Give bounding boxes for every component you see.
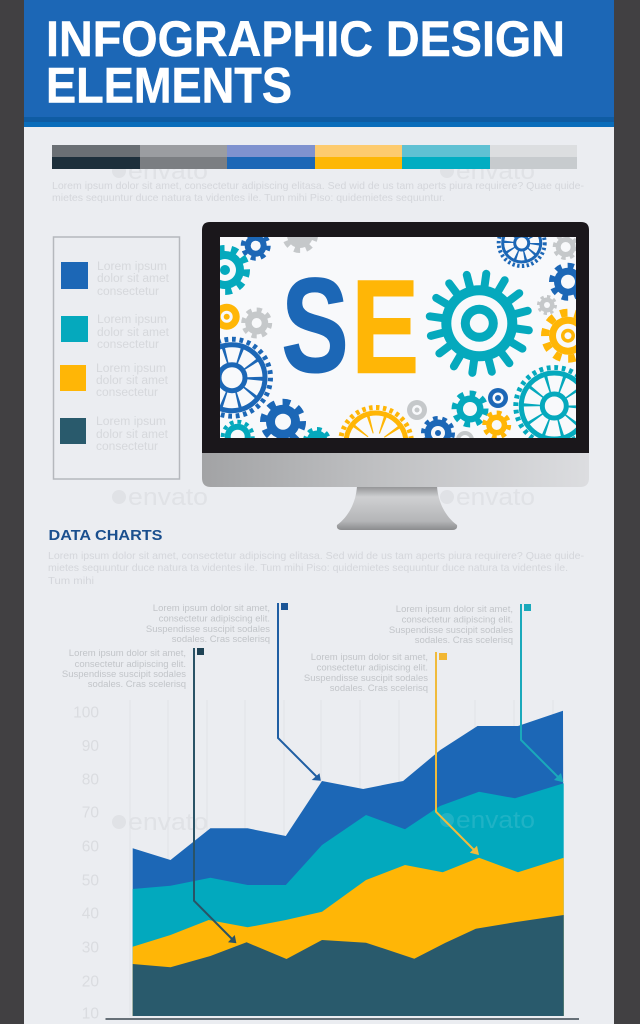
big blue spoked wheel left xyxy=(220,336,273,419)
blue gear right xyxy=(552,266,584,298)
legend item: blue: Lorem ipsum xyxy=(97,261,167,273)
section description: mietes sequuntur duce natura ta videntes ile. Tum mihi Piso: quidemietes sequuntur duce natura ta videntes ile. xyxy=(48,562,568,574)
series: teal area xyxy=(133,783,564,1016)
y-axis labels: 20 xyxy=(82,974,99,990)
series: yellow area xyxy=(133,858,564,1016)
series: dark teal area xyxy=(133,915,564,1016)
leader arrow: teal xyxy=(521,604,563,782)
grey disc xyxy=(407,400,427,420)
callout text: yellow: sodales. Cras scelerisq xyxy=(330,683,428,694)
y-axis labels: 40 xyxy=(82,906,99,922)
callout text: teal xyxy=(389,604,513,646)
callout text: dark teal: Suspendisse suscipit sodales xyxy=(62,669,186,680)
monitor chin xyxy=(202,453,589,487)
yellow gear right xyxy=(545,313,591,359)
legend item: yellow: Lorem ipsum xyxy=(96,363,166,375)
callout text: dark blue xyxy=(146,603,270,645)
legend item: teal: dolor sit amet xyxy=(97,327,170,339)
legend panel xyxy=(54,237,180,479)
teal gear bottom xyxy=(303,427,330,438)
section description: Lorem ipsum dolor sit amet, consectetur adipiscing elitasa. Sed wid de us tam aperts piura requirere? Quae quide- xyxy=(48,550,584,562)
monitor screen xyxy=(220,237,576,438)
y-axis labels: 60 xyxy=(82,838,99,856)
section description xyxy=(48,550,584,587)
blue disc xyxy=(488,388,508,408)
teal gear bottom-left xyxy=(220,420,255,438)
area chart xyxy=(73,700,579,1022)
blue gear bottom xyxy=(264,402,302,441)
section heading: data charts: DATA CHARTS xyxy=(48,528,163,544)
series: blue area xyxy=(133,711,564,1016)
leader arrow: dark teal xyxy=(194,648,236,943)
legend item: yellow: dolor sit amet xyxy=(96,375,169,387)
blue spoked wheel top-right xyxy=(496,237,547,268)
yellow gear bottom-right xyxy=(485,413,509,437)
callout text: dark blue: Lorem ipsum dolor sit amet, xyxy=(153,603,270,614)
legend item: dark teal xyxy=(60,416,169,453)
teal spoked wheel right xyxy=(513,365,576,438)
y-axis labels: 90 xyxy=(82,738,99,755)
y-axis labels: 30 xyxy=(82,940,99,956)
y-axis labels: 70 xyxy=(82,804,99,822)
blue gear bottom centre xyxy=(421,416,455,438)
header banner xyxy=(24,0,614,127)
big teal gear replacing O xyxy=(430,274,529,373)
x-axis baseline xyxy=(106,1018,579,1020)
legend item: yellow: consectetur xyxy=(96,387,158,399)
yellow coin left xyxy=(220,304,240,330)
leader arrow: yellow xyxy=(436,652,479,855)
legend item: dark teal: Lorem ipsum xyxy=(96,416,166,428)
y-axis labels xyxy=(73,704,99,1022)
monitor stand xyxy=(337,486,457,530)
title: INFOGRAPHIC DESIGN xyxy=(46,11,565,67)
monitor xyxy=(194,220,593,530)
legend item: teal xyxy=(61,314,170,351)
intro text: mietes sequuntur duce natura ta videntes ile. Tum mihi Piso: quidemietes sequuntur. xyxy=(52,192,445,204)
watermarks: envato xyxy=(456,158,535,185)
callout text: dark blue: sodales. Cras scelerisq xyxy=(172,634,270,645)
y-axis labels: 10 xyxy=(82,1006,99,1022)
intro text: Lorem ipsum dolor sit amet, consectetur adipiscing elitasa. Sed wid de us tam aperts piura requirere? Quae quide- xyxy=(52,180,584,192)
grey gear top-right xyxy=(555,236,577,258)
watermark over chart: envato xyxy=(456,807,535,834)
section description: Tum mihi xyxy=(48,575,94,587)
callout text: yellow: Lorem ipsum dolor sit amet, xyxy=(311,652,428,663)
letter E: E xyxy=(352,253,419,402)
blue gear top-left xyxy=(243,233,268,258)
callout text: dark teal: sodales. Cras scelerisq xyxy=(88,679,186,690)
title xyxy=(46,11,565,114)
teal gear left xyxy=(220,245,250,295)
y-axis labels: 80 xyxy=(82,772,99,788)
yellow spoked wheel bottom xyxy=(338,405,414,438)
callout text: teal: Lorem ipsum dolor sit amet, xyxy=(396,604,513,615)
small grey gear right xyxy=(538,296,556,314)
y-axis labels: 50 xyxy=(82,872,99,890)
watermarks xyxy=(112,158,535,836)
y-axis labels: 100 xyxy=(73,704,99,722)
SEO gears illustration xyxy=(220,237,576,438)
callout text: teal: sodales. Cras scelerisq xyxy=(415,635,513,646)
callout text: yellow: consectetur adipiscing elit. xyxy=(317,662,428,674)
watermarks: envato xyxy=(128,809,208,836)
colour palette strip xyxy=(52,145,577,169)
callout text: dark blue: consectetur adipiscing elit. xyxy=(159,614,270,624)
watermarks: envato xyxy=(128,158,208,185)
legend item: teal: Lorem ipsum xyxy=(97,314,167,326)
watermarks: envato xyxy=(456,484,535,511)
callout text: teal: consectetur adipiscing elit. xyxy=(402,614,513,626)
callout text: dark teal xyxy=(62,648,186,690)
monitor bezel xyxy=(202,222,589,453)
leader arrow: blue xyxy=(278,603,321,781)
callout text: yellow xyxy=(304,652,428,694)
callout text: dark teal: Lorem ipsum dolor sit amet, xyxy=(69,648,186,659)
title: ELEMENTS xyxy=(46,58,292,114)
legend item: dark teal: dolor sit amet xyxy=(96,429,169,441)
callout text: dark blue: Suspendisse suscipit sodales xyxy=(146,624,270,635)
legend item: blue xyxy=(61,261,170,298)
callout text: dark teal: consectetur adipiscing elit. xyxy=(75,659,186,670)
grey gear top xyxy=(284,237,318,253)
teal gear bottom-right xyxy=(454,394,486,424)
legend item: blue: dolor sit amet xyxy=(97,273,170,285)
legend item: dark teal: consectetur xyxy=(96,441,158,453)
legend item: yellow xyxy=(60,363,169,399)
callout text: teal: Suspendisse suscipit sodales xyxy=(389,625,513,636)
grey gear bottom xyxy=(456,431,474,438)
intro text xyxy=(52,180,584,204)
letter S: S xyxy=(282,252,349,401)
grey gear left xyxy=(244,310,270,336)
watermarks: envato xyxy=(128,484,208,511)
legend item: blue: consectetur xyxy=(97,286,159,298)
legend item: teal: consectetur xyxy=(97,339,159,351)
callout text: yellow: Suspendisse suscipit sodales xyxy=(304,673,428,684)
